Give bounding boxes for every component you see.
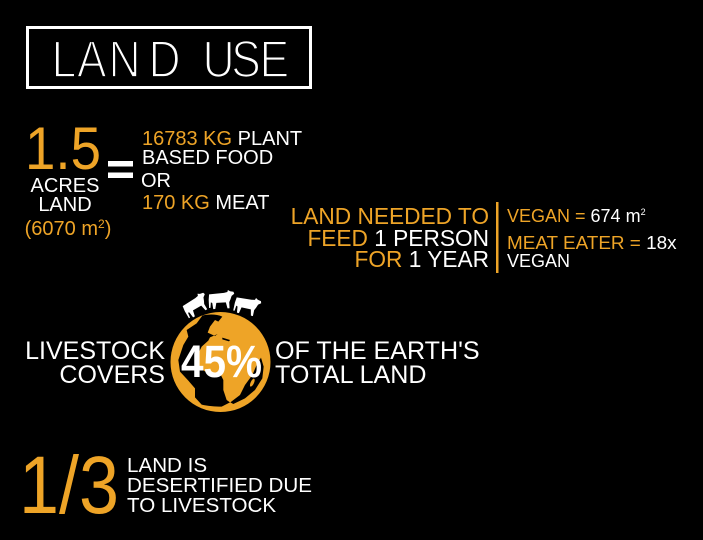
acres land label: ACRES <box>31 175 99 197</box>
food yield text: BASED FOOD <box>142 147 273 169</box>
vertical divider <box>496 202 498 273</box>
land needed heading: FEED 1 PERSON <box>307 225 489 251</box>
big number 1.5: 1.5 <box>25 115 101 182</box>
panel: land needed per person <box>291 202 677 273</box>
panel: desertification <box>19 440 312 531</box>
earth total land text: TOTAL LAND <box>275 361 427 389</box>
food yield text: 170 KG MEAT <box>142 192 269 214</box>
land needed heading <box>291 203 489 272</box>
desertified text: DESERTIFIED DUE <box>127 474 312 497</box>
land needed heading: FOR 1 YEAR <box>354 246 489 272</box>
desertified text <box>127 454 312 517</box>
vegan and meat eater figures: VEGAN <box>507 251 570 271</box>
vegan and meat eater figures: 2 <box>641 207 646 217</box>
earth total land text: OF THE EARTH'S <box>275 337 480 365</box>
big fraction 1/3: 1/3 <box>19 440 119 531</box>
food yield text: 16783 KG PLANT <box>142 128 302 150</box>
acres land label: (6070 m <box>25 218 98 240</box>
panel: acres equivalence <box>25 115 302 240</box>
equals sign <box>108 161 133 178</box>
livestock covers text <box>25 337 165 389</box>
land needed heading: LAND NEEDED TO <box>291 203 489 229</box>
food yield text <box>141 128 302 214</box>
earth total land text <box>275 337 480 389</box>
acres land label <box>25 175 111 240</box>
icon: globe <box>170 312 270 412</box>
vegan and meat eater figures: VEGAN = 674 m <box>507 206 641 226</box>
desertified text: LAND IS <box>127 454 207 477</box>
icon: three cows <box>180 290 262 319</box>
desertified text: TO LIVESTOCK <box>127 494 276 517</box>
livestock covers text: COVERS <box>59 361 165 389</box>
livestock covers text: LIVESTOCK <box>25 337 165 365</box>
acres land label: ) <box>105 218 111 240</box>
acres land label: 2 <box>98 217 105 231</box>
vegan and meat eater figures <box>507 206 677 271</box>
title: LAND USE <box>52 31 289 89</box>
45 percent label: 45% <box>181 336 262 387</box>
acres land label: LAND <box>38 194 92 216</box>
food yield text: OR <box>141 170 171 192</box>
vegan and meat eater figures: MEAT EATER = 18x <box>507 233 677 254</box>
panel: livestock coverage <box>25 290 480 412</box>
